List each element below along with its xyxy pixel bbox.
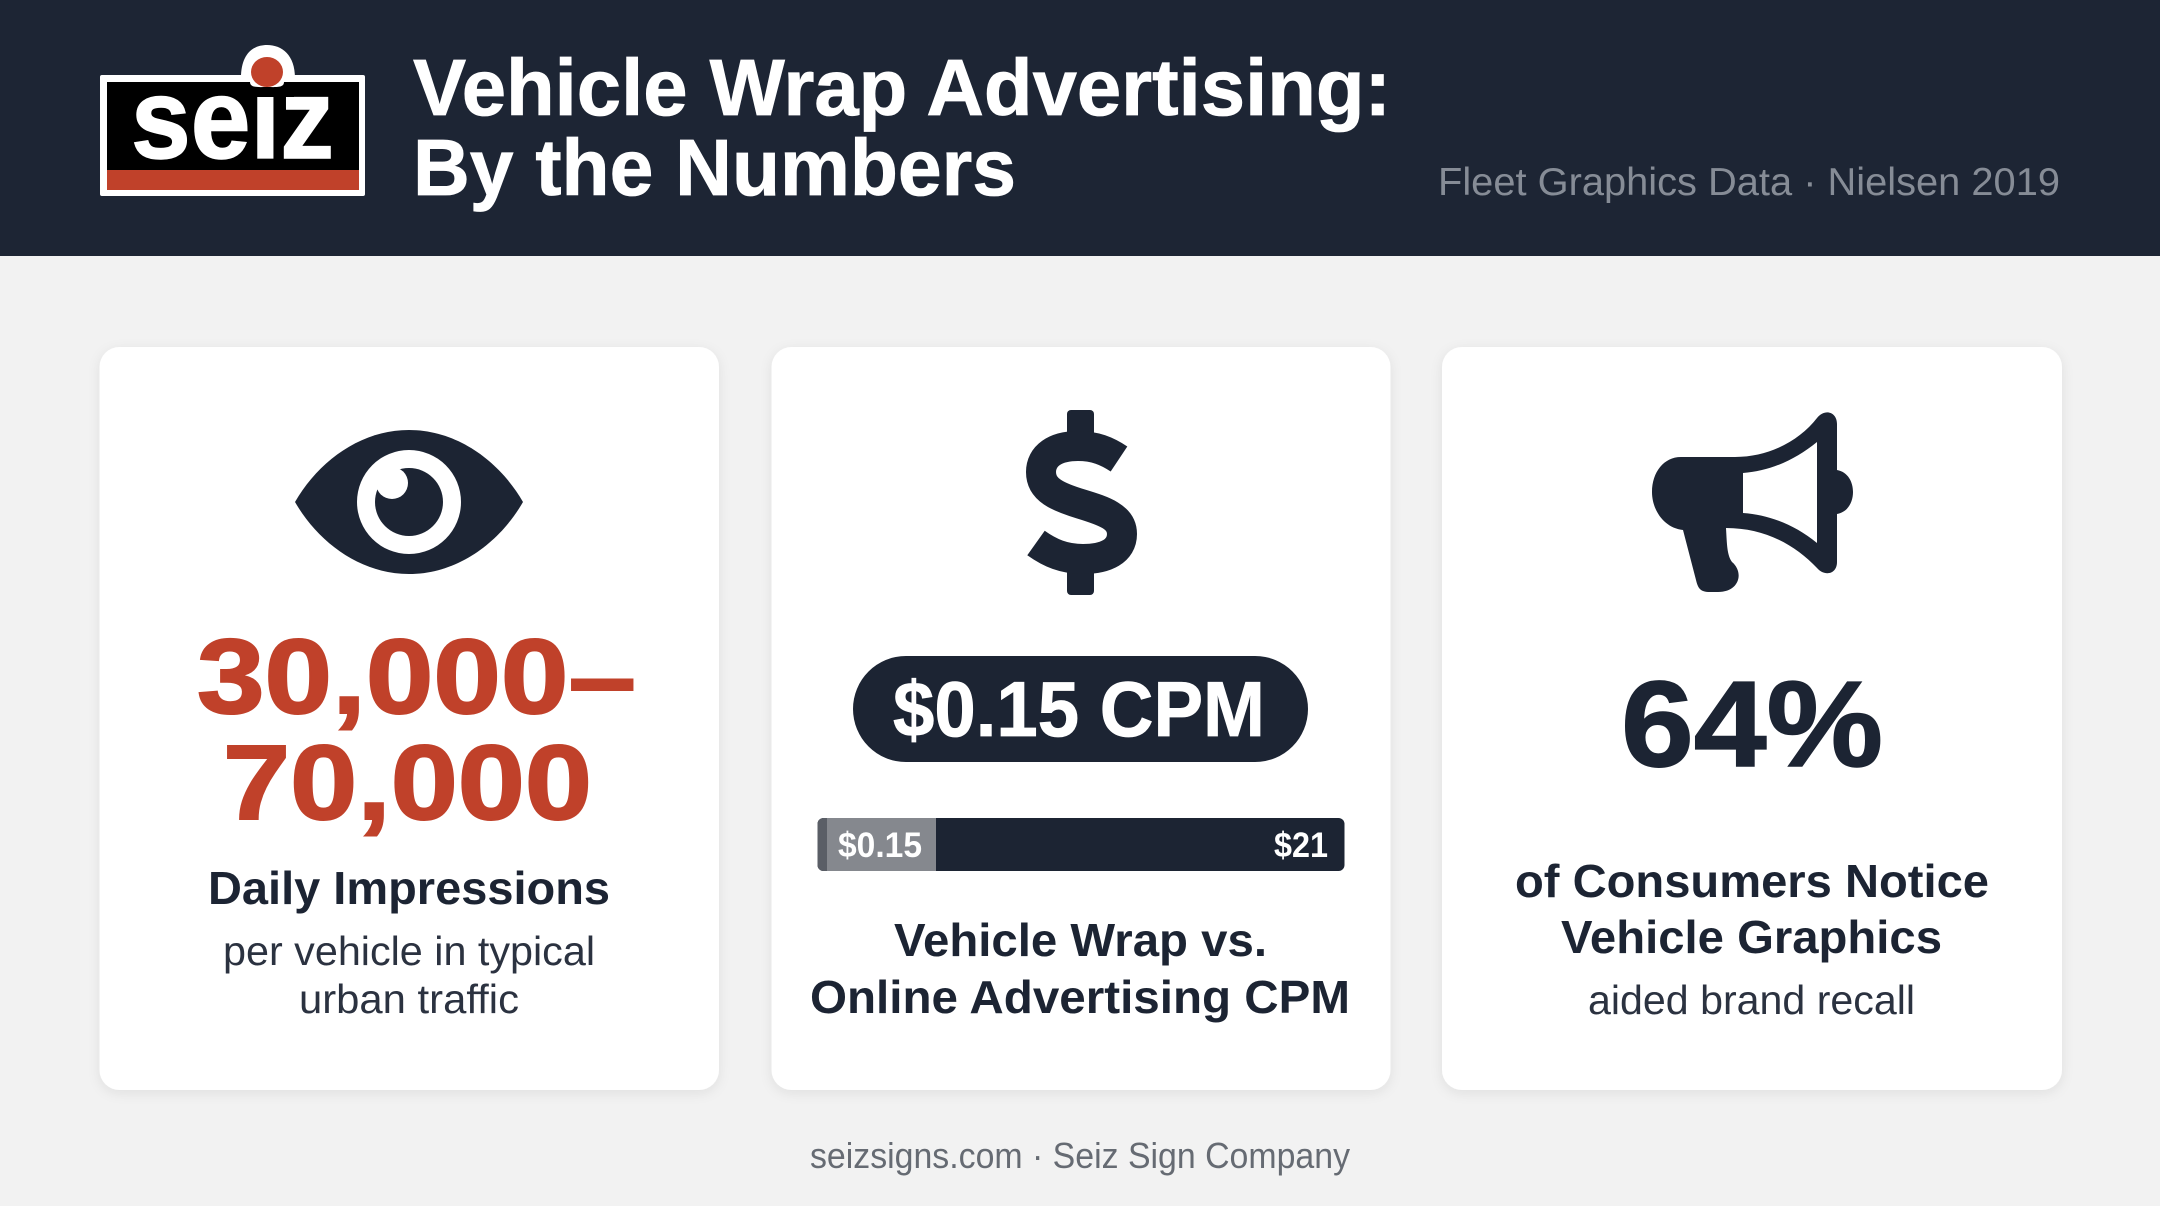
panel: consumer recall <box>1442 347 2062 1090</box>
bar: vehicle wrap vs online CPM: $21 <box>1274 826 1328 865</box>
header band <box>0 0 2160 256</box>
description <box>223 928 595 1022</box>
label <box>810 914 1350 1023</box>
footer: seizsigns.com · Seiz Sign Company <box>810 1135 1350 1176</box>
logo: seiz: seiz <box>131 56 334 183</box>
label: Vehicle Graphics <box>1561 911 1942 963</box>
bar: vehicle wrap vs online CPM: $0.15 <box>838 826 922 865</box>
bar: vehicle wrap vs online CPM <box>818 818 1344 871</box>
label: Online Advertising CPM <box>810 971 1350 1023</box>
title: By the Numbers <box>413 123 1016 212</box>
pill: CPM value: $0.15 CPM <box>893 665 1265 753</box>
big number <box>197 618 636 842</box>
label <box>1515 855 1989 963</box>
big number: 64% <box>1621 656 1883 792</box>
panel: daily impressions <box>100 347 719 1090</box>
title <box>413 43 1391 212</box>
big number: 30,000– <box>197 618 636 736</box>
label: Daily Impressions <box>208 862 610 914</box>
icon: megaphone <box>1652 412 1853 592</box>
source note: Fleet Graphics Data · Nielsen 2019 <box>1438 161 2060 204</box>
panel: cost per thousand <box>772 347 1390 1090</box>
label: Vehicle Wrap vs. <box>894 914 1267 966</box>
description: per vehicle in typical <box>223 928 595 974</box>
description: aided brand recall <box>1588 977 1915 1023</box>
title: Vehicle Wrap Advertising: <box>413 43 1391 132</box>
icon: dollar sign <box>1036 410 1122 595</box>
description: urban traffic <box>299 976 519 1022</box>
big number: 70,000 <box>223 724 592 842</box>
label: of Consumers Notice <box>1515 855 1989 907</box>
logo: seiz <box>100 45 365 196</box>
icon: eye <box>295 430 523 574</box>
